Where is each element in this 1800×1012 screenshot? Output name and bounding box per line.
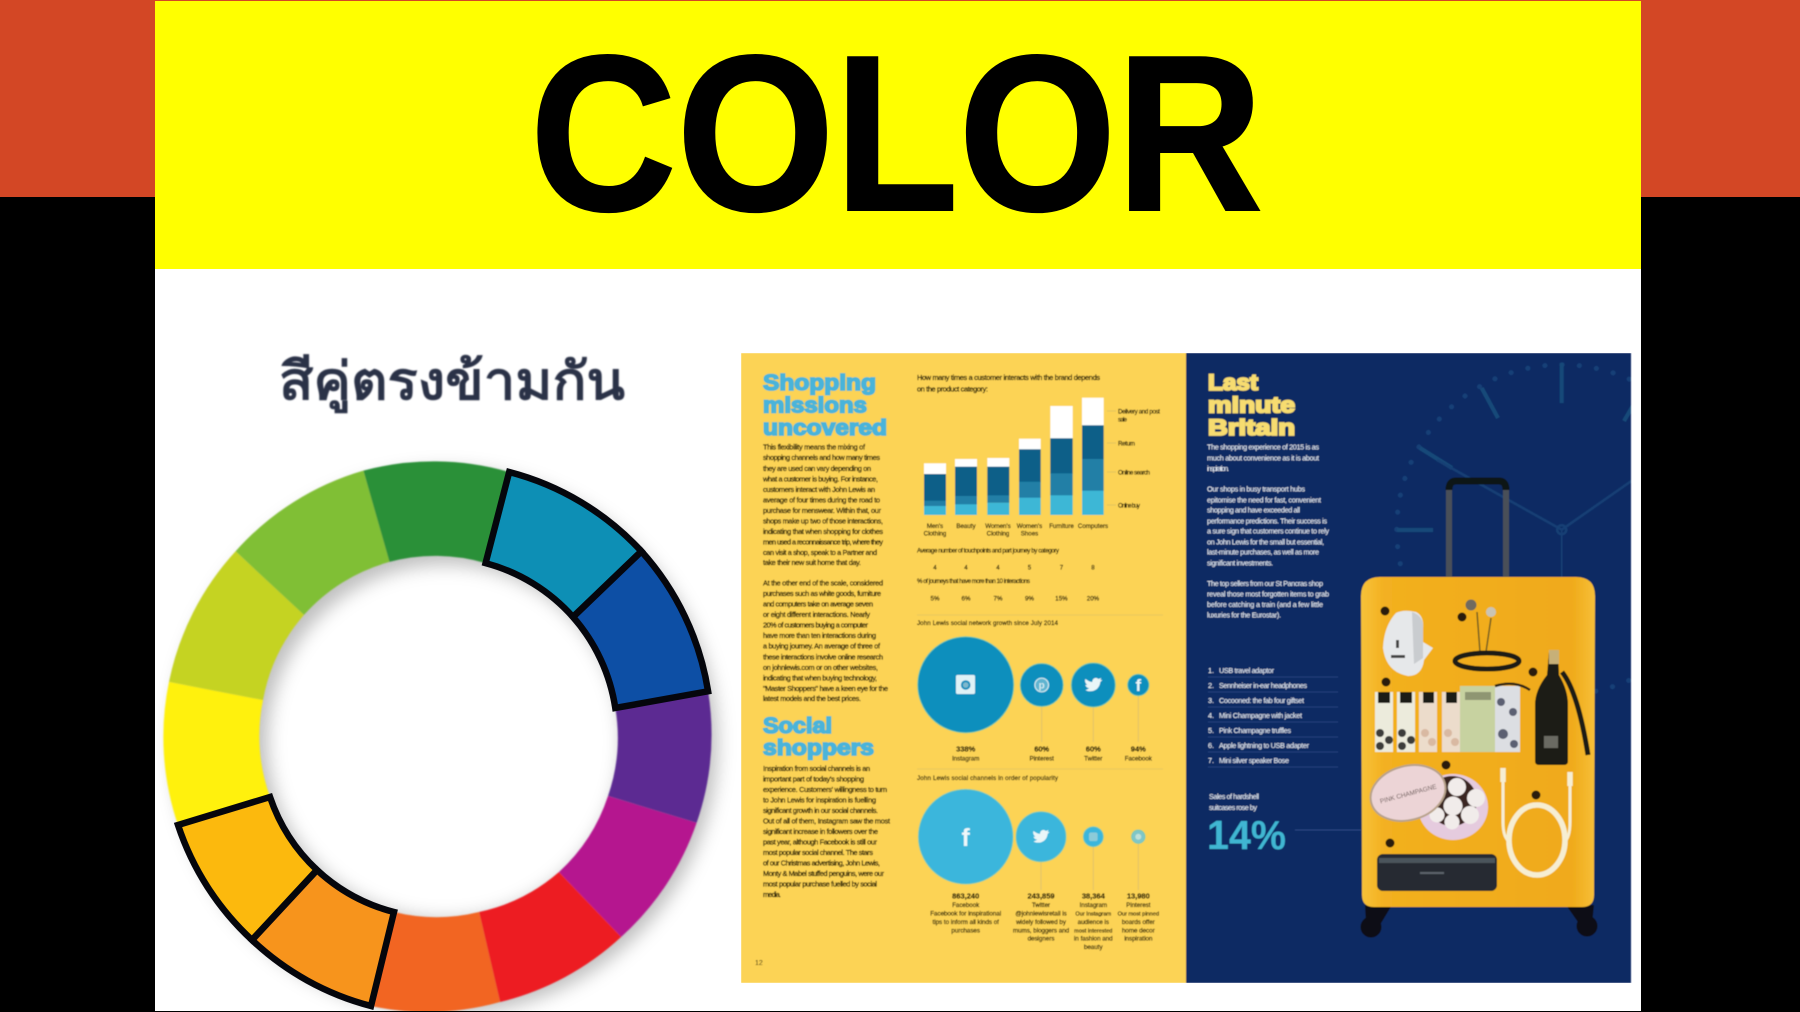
popularity values and notes: in fashion and xyxy=(1074,936,1113,942)
body text: shopping missions: "Master Shoppers" have a keen eye for the xyxy=(763,684,888,693)
top sellers list: 5. xyxy=(1208,726,1214,735)
interactions row: 6% xyxy=(962,596,971,602)
top sellers list: USB travel adaptor xyxy=(1219,666,1275,675)
popularity values and notes: designers xyxy=(1028,936,1054,942)
touchpoints row xyxy=(917,548,1095,572)
callout: suitcase sales: suitcases rose by xyxy=(1209,803,1257,812)
body text: social shoppers: Out of all of them, Instagram saw the most xyxy=(763,816,890,826)
outlined pair: teal and blue xyxy=(486,472,708,708)
item: lightning cable xyxy=(1503,768,1570,875)
popularity values and notes: 38,364 xyxy=(1082,892,1106,900)
page number: 12 xyxy=(755,960,763,967)
chart category labels: Clothing xyxy=(987,530,1010,538)
chart legend xyxy=(1107,408,1160,510)
title banner xyxy=(155,1,1641,269)
top sellers list: 7. xyxy=(1208,756,1214,765)
popularity values and notes: Our most pinned xyxy=(1118,912,1159,918)
heading: last minute britain: Britain xyxy=(1208,415,1295,440)
interactions row: 20% xyxy=(1087,596,1100,602)
popularity values and notes: Instagram xyxy=(1080,902,1107,909)
background: orange-red bands xyxy=(0,0,1800,197)
stacked bar chart xyxy=(924,398,1104,515)
item: gift box xyxy=(1460,684,1530,752)
interactions row: % of journeys that have more than 10 interactions xyxy=(917,578,1030,585)
bubble chart: social network growth: John Lewis social network growth since July 2014 xyxy=(917,620,1059,627)
top sellers list: Pink Champagne truffles xyxy=(1219,726,1291,735)
body text: social shoppers: past year, although Facebook is still our xyxy=(763,838,878,846)
popularity values and notes: 243,859 xyxy=(1027,892,1055,900)
chart legend: Delivery and post xyxy=(1118,408,1160,416)
interactions row: 5% xyxy=(931,596,940,602)
icon: instagram xyxy=(956,675,975,694)
popularity values and notes: most interested xyxy=(1074,928,1112,934)
body text: shopping missions: indicating that when shopping for clothes xyxy=(763,527,883,536)
body text: social shoppers: most popular social channel. The stars xyxy=(763,848,873,857)
body text: shopping missions: indicating that when buying technology, xyxy=(763,674,877,682)
body text: shopping missions: have more than ten interactions during xyxy=(763,631,876,640)
item number markers xyxy=(1380,606,1540,848)
suitcase body xyxy=(1361,577,1595,907)
chart heading xyxy=(917,373,1100,394)
popularity values and notes: purchases xyxy=(951,928,980,934)
heading: social shoppers xyxy=(763,713,874,760)
touchpoints row: 5 xyxy=(1028,564,1032,572)
body text: shopping missions: purchases such as white goods, furniture xyxy=(763,589,881,598)
chart category labels: Furniture xyxy=(1049,523,1074,530)
growth values: Instagram xyxy=(952,756,979,762)
callout: suitcase sales xyxy=(1207,792,1361,858)
top sellers list: Apple lightning to USB adapter xyxy=(1219,741,1310,750)
touchpoints row: 4 xyxy=(996,564,1000,572)
top sellers list: Sennheiser in-ear headphones xyxy=(1219,681,1307,690)
body text: social shoppers: media. xyxy=(763,890,781,899)
suitcase handle xyxy=(1449,481,1506,578)
popularity values and notes: audience is xyxy=(1078,919,1109,926)
chart category labels: Shoes xyxy=(1021,530,1038,538)
growth values: Facebook xyxy=(1125,756,1153,762)
body text: shopping missions: customers interact with John Lewis an xyxy=(763,485,875,494)
bubble chart: social channels by popularity xyxy=(917,775,1159,951)
heading: shopping missions uncovered xyxy=(763,370,887,440)
growth values: Twitter xyxy=(1084,756,1102,762)
icon: pinterest xyxy=(1035,678,1048,692)
heading: shopping missions uncovered: Shopping xyxy=(763,370,876,395)
icon: twitter large xyxy=(1033,830,1050,843)
chart heading: How many times a customer interacts with the brand depends xyxy=(917,373,1100,382)
popularity values and notes: home decor xyxy=(1122,928,1155,934)
growth values: 60% xyxy=(1086,744,1101,754)
icon: pinterest small xyxy=(1135,834,1141,840)
suitcase illustration xyxy=(1360,481,1598,938)
item: headphones xyxy=(1455,600,1519,669)
chart category labels: Beauty xyxy=(956,523,977,530)
top sellers list xyxy=(1208,666,1338,767)
chart heading: on the product category: xyxy=(917,384,988,394)
body text: shopping missions: latest models and the best prices. xyxy=(763,694,861,703)
body text: last minute britain xyxy=(1207,442,1329,620)
heading: last minute britain: minute xyxy=(1208,392,1295,418)
icon: pinterest: p xyxy=(1039,680,1045,692)
body text: last minute britain: reveal those most forgotten items to grab xyxy=(1207,590,1329,598)
popularity values and notes: @johnlewisretail is xyxy=(1015,910,1067,918)
top sellers list: 4. xyxy=(1208,711,1214,720)
chart category labels: Computers xyxy=(1078,523,1108,530)
popularity values and notes: mums, bloggers and xyxy=(1013,928,1070,934)
item: champagne bottle xyxy=(1535,650,1588,765)
popularity values and notes: boards offer xyxy=(1122,919,1155,926)
body text: last minute britain: a sure sign that customers continue to rely xyxy=(1207,526,1329,536)
body text: last minute britain: The shopping experience of 2015 is as xyxy=(1207,442,1319,452)
body text: social shoppers: experience. Customers' willingness to turn xyxy=(763,785,887,794)
body text: shopping missions: 20% of customers buying a computer xyxy=(763,620,869,630)
top sellers list: Mini Champagne with jacket xyxy=(1219,711,1302,720)
chart category labels: Clothing xyxy=(924,530,947,538)
body text: shopping missions: purchase for menswear. Within that, our xyxy=(763,506,882,515)
heading: last minute britain xyxy=(1208,370,1295,440)
chart category labels: Women's xyxy=(985,523,1011,530)
bubble chart: social network growth xyxy=(917,620,1153,762)
chart category labels xyxy=(924,523,1108,538)
chart category labels: Women's xyxy=(1017,523,1042,530)
body text: shopping missions: shops make up two of those interactions, xyxy=(763,516,883,526)
growth values: 338% xyxy=(956,744,976,754)
growth values: 94% xyxy=(1131,744,1146,754)
top sellers list: 2. xyxy=(1208,681,1214,690)
top sellers list: Cocooned: the fab four giftset xyxy=(1219,696,1304,705)
top sellers list: Mini silver speaker Bose xyxy=(1219,756,1289,765)
interactions row: 15% xyxy=(1055,596,1068,602)
body text: last minute britain: last-minute purchases, as well as more xyxy=(1207,548,1319,556)
body text: last minute britain: shopping and have exceeded all xyxy=(1207,506,1300,514)
interactions row: 9% xyxy=(1025,596,1034,602)
body text: last minute britain: much about convenience as it is about xyxy=(1207,454,1319,462)
chart category labels: Men's xyxy=(927,523,943,530)
touchpoints row: 4 xyxy=(933,564,937,572)
body text: shopping missions: they are used can vary depending on xyxy=(763,464,871,473)
body text: social shoppers: Monty & Mabel stuffed penguins, were our xyxy=(763,869,885,878)
body text: shopping missions xyxy=(762,442,888,703)
body text: last minute britain: Our shops in busy transport hubs xyxy=(1207,484,1305,494)
body text: shopping missions: This flexibility means the mixing of xyxy=(763,442,866,452)
top sellers list: 6. xyxy=(1208,741,1214,750)
body text: last minute britain: epitomise the need for fast, convenient xyxy=(1207,496,1321,504)
popularity values and notes: tips to inform all kinds of xyxy=(933,919,999,926)
wheel heading: สีคู่ตรงข้ามกัน xyxy=(279,353,625,413)
popularity values and notes: Facebook for inspirational xyxy=(930,910,1001,918)
body text: social shoppers xyxy=(763,764,890,899)
chart legend: Online buy xyxy=(1118,502,1141,510)
touchpoints row: 4 xyxy=(964,564,968,572)
body text: last minute britain: significant investments. xyxy=(1207,558,1273,568)
popularity values and notes: Facebook xyxy=(952,902,980,909)
body text: last minute britain: inspiration. xyxy=(1207,464,1229,473)
popularity values and notes: beauty xyxy=(1084,944,1103,951)
heading: shopping missions uncovered: missions xyxy=(763,392,867,418)
body text: shopping missions: can visit a shop, speak to a Partner and xyxy=(763,548,877,557)
body text: shopping missions: At the other end of the scale, considered xyxy=(763,578,883,588)
body text: shopping missions: men used a reconnaissance trip, where they xyxy=(763,538,883,546)
wheel shadow xyxy=(220,517,670,967)
body text: shopping missions: take their new suit home that day. xyxy=(763,558,861,567)
heading: social shoppers: Social xyxy=(763,713,832,738)
navy page xyxy=(1185,353,1632,983)
icon: facebook large: f xyxy=(962,824,971,852)
body text: shopping missions: a buying journey. An average of three of xyxy=(763,642,881,650)
chart legend: sale xyxy=(1118,416,1128,424)
growth values xyxy=(952,744,1153,762)
chart legend: Return xyxy=(1118,440,1136,448)
popularity values and notes: 13,980 xyxy=(1127,892,1150,900)
item: bluetooth speaker xyxy=(1377,854,1497,891)
touchpoints row: 7 xyxy=(1060,564,1064,572)
body text: shopping missions: and computers take on average seven xyxy=(763,600,873,608)
growth values: Pinterest xyxy=(1029,756,1054,762)
body text: shopping missions: or eight different interactions. Nearly xyxy=(763,610,870,619)
item: champagne truffles xyxy=(1364,757,1488,840)
touchpoints row: Average number of touchpoints and part journey by category xyxy=(917,548,1060,554)
body text: last minute britain: on John Lewis for the small but essential, xyxy=(1207,538,1324,546)
item: travel adaptor xyxy=(1383,611,1433,676)
yellow page xyxy=(741,353,1186,983)
body text: shopping missions: on johnlewis.com or on other websites, xyxy=(763,663,878,672)
callout: suitcase sales: 14% xyxy=(1207,812,1286,858)
body text: social shoppers: important part of today's shopping xyxy=(763,774,864,784)
body text: social shoppers: most popular purchase fuelled by social xyxy=(763,880,877,888)
chart legend: Online search xyxy=(1118,470,1151,476)
body text: social shoppers: of our Christmas advertising, John Lewis, xyxy=(763,858,880,868)
interactions row: 7% xyxy=(994,596,1003,602)
content panel xyxy=(155,269,1727,1012)
body text: shopping missions: average of four times during the road to xyxy=(763,496,880,504)
body text: shopping missions: these interactions involve online research xyxy=(763,652,883,662)
bubble chart: social channels by popularity: John Lewis social channels in order of popularity xyxy=(917,775,1059,782)
body text: social shoppers: to John Lewis for inspiration is fuelling xyxy=(763,796,876,804)
popularity values and notes: Pinterest xyxy=(1126,902,1151,909)
interactions row xyxy=(917,578,1100,602)
body text: last minute britain: The top sellers from our St Pancras shop xyxy=(1207,579,1323,588)
top sellers list: 1. xyxy=(1208,666,1214,675)
body text: social shoppers: significant increase in followers over the xyxy=(763,827,878,836)
item: toiletry bottles xyxy=(1375,692,1460,752)
body text: last minute britain: performance predictions. Their success is xyxy=(1207,516,1327,526)
title text: COLOR xyxy=(530,10,1263,258)
top sellers list: 3. xyxy=(1208,696,1214,705)
body text: last minute britain: luxuries for the Eurostar). xyxy=(1207,610,1281,620)
popularity values and notes: widely followed by xyxy=(1015,919,1067,926)
popularity values and notes: 863,240 xyxy=(952,892,979,900)
item: champagne truffles: PINK CHAMPAGNE xyxy=(1379,783,1438,805)
popularity values and notes: Our Instagram xyxy=(1075,912,1112,918)
icon: twitter xyxy=(1085,678,1102,691)
popularity values and notes: inspiration xyxy=(1124,936,1153,942)
icon: instagram small xyxy=(1089,832,1098,841)
icon: facebook: f xyxy=(1135,676,1141,695)
growth values: 60% xyxy=(1034,744,1050,754)
popularity values and notes xyxy=(930,892,1159,951)
callout: suitcase sales: Sales of hardshell xyxy=(1209,792,1259,801)
suitcase wheels xyxy=(1360,905,1598,938)
heading: last minute britain: Last xyxy=(1208,370,1259,395)
body text: shopping missions: what a customer is buying. For instance, xyxy=(762,474,878,484)
body text: shopping missions: shopping channels and how many times xyxy=(763,453,880,462)
panel: magazine spread xyxy=(741,353,1727,983)
colour wheel xyxy=(163,461,711,1012)
body text: social shoppers: significant growth in our social channels. xyxy=(763,806,878,815)
body text: social shoppers: Inspiration from social channels is an xyxy=(763,764,870,773)
touchpoints row: 8 xyxy=(1091,564,1095,572)
heading: shopping missions uncovered: uncovered xyxy=(763,415,887,440)
panel: complementary colour wheel xyxy=(163,353,711,1012)
clock face decoration xyxy=(1394,362,1632,694)
body text: last minute britain: before catching a train (and a few little xyxy=(1207,600,1323,609)
popularity values and notes: Twitter xyxy=(1032,902,1050,909)
outlined pair: amber and orange xyxy=(178,797,394,1006)
heading: social shoppers: shoppers xyxy=(763,735,874,760)
